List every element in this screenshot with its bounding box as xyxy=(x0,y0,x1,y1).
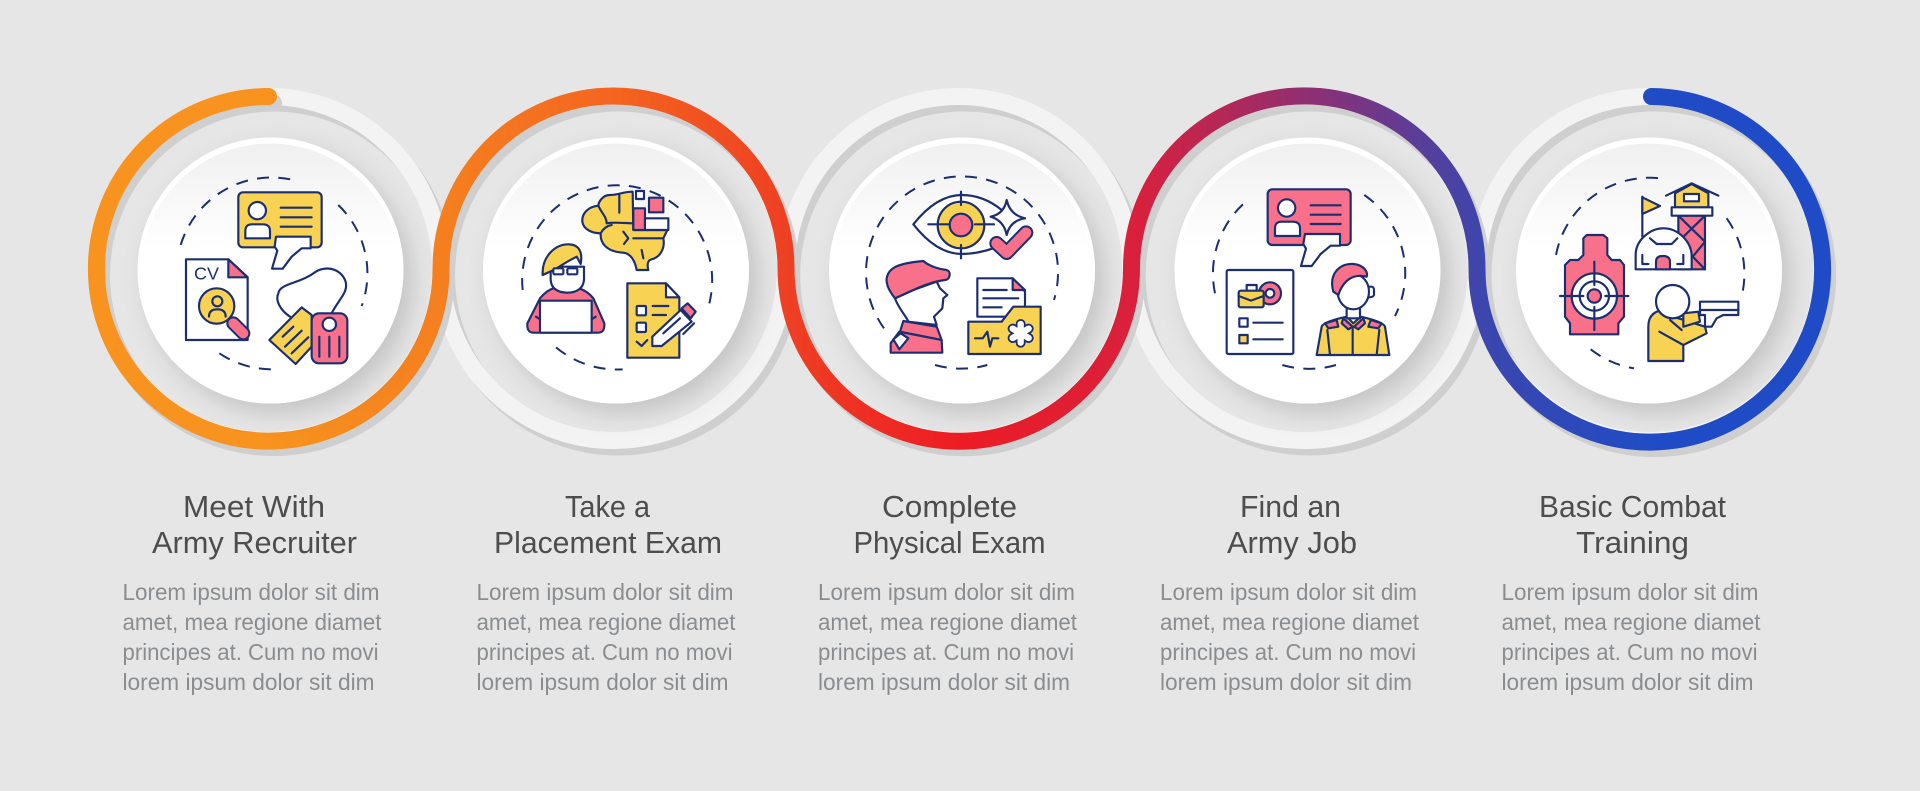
heading: step 2: Placement Exam xyxy=(494,526,722,560)
panel: step 2 disc xyxy=(483,138,749,404)
text block: step 4: lorem ipsum dolor sit dim xyxy=(1160,669,1412,695)
text block: step 2 xyxy=(476,579,736,695)
text block: step 5 xyxy=(1502,579,1761,695)
text block: step 4 xyxy=(1160,579,1419,695)
ring tracks: light circles behind the ribbon xyxy=(96,96,1827,447)
heading: step 3: Physical Exam xyxy=(854,526,1046,560)
heading: step 5 xyxy=(1539,490,1727,560)
icon: placement exam brain, student and checklist xyxy=(522,185,712,369)
text block: step 2: Lorem ipsum dolor sit dim xyxy=(476,579,734,605)
heading: step 1: Meet With xyxy=(183,490,325,524)
icon: eye test, soldier and medical folder xyxy=(866,176,1058,369)
text block: step 1 xyxy=(122,579,382,695)
text block: step 4: amet, mea regione diamet xyxy=(1160,609,1419,635)
heading: step 5: Basic Combat xyxy=(1539,490,1727,524)
text block: step 2: principes at. Cum no movi xyxy=(476,639,732,665)
text block: step 5: lorem ipsum dolor sit dim xyxy=(1502,669,1754,695)
heading: step 5: Training xyxy=(1576,526,1689,560)
text block: step 2: amet, mea regione diamet xyxy=(476,609,736,635)
text block: step 1: amet, mea regione diamet xyxy=(122,609,382,635)
text block: step 3 xyxy=(818,579,1077,695)
heading: step 1: Army Recruiter xyxy=(152,526,357,560)
heading: step 2: Take a xyxy=(565,490,650,524)
panel: step 3 disc xyxy=(829,138,1095,404)
heading: step 4: Army Job xyxy=(1227,526,1357,560)
text block: step 1: Lorem ipsum dolor sit dim xyxy=(122,579,380,605)
text block: step 2: lorem ipsum dolor sit dim xyxy=(476,669,728,695)
heading: step 4 xyxy=(1227,490,1357,560)
panel: step 5 disc xyxy=(1516,138,1782,404)
heading: step 3: Complete xyxy=(882,490,1017,524)
icon: recruiter ID card, CV and dog tags: CV xyxy=(194,263,219,283)
text block: step 5: amet, mea regione diamet xyxy=(1502,609,1761,635)
panel: step 4 disc xyxy=(1174,138,1440,404)
text block: step 5: Lorem ipsum dolor sit dim xyxy=(1502,579,1758,605)
icon: recruiter ID card, CV and dog tags xyxy=(181,177,367,369)
text block: step 5: principes at. Cum no movi xyxy=(1502,639,1758,665)
heading: step 2 xyxy=(494,490,722,560)
ribbon: gradient wave connecting the five steps xyxy=(96,96,1828,449)
heading: step 1 xyxy=(152,490,357,560)
text block: step 1: lorem ipsum dolor sit dim xyxy=(122,669,374,695)
text block: step 1: principes at. Cum no movi xyxy=(122,639,378,665)
text block: step 3: amet, mea regione diamet xyxy=(818,609,1077,635)
heading: step 4: Find an xyxy=(1240,490,1341,524)
panel: step 1 disc xyxy=(138,138,404,404)
text block: step 4: Lorem ipsum dolor sit dim xyxy=(1160,579,1417,605)
heading: step 3 xyxy=(854,490,1046,560)
icon: ID card, job checklist and soldier xyxy=(1213,189,1405,369)
text block: step 3: Lorem ipsum dolor sit dim xyxy=(818,579,1075,605)
text block: step 3: lorem ipsum dolor sit dim xyxy=(818,669,1070,695)
icon: shooting target, watch tower and shooter xyxy=(1556,178,1744,368)
text block: step 4: principes at. Cum no movi xyxy=(1160,639,1416,665)
text block: step 3: principes at. Cum no movi xyxy=(818,639,1074,665)
